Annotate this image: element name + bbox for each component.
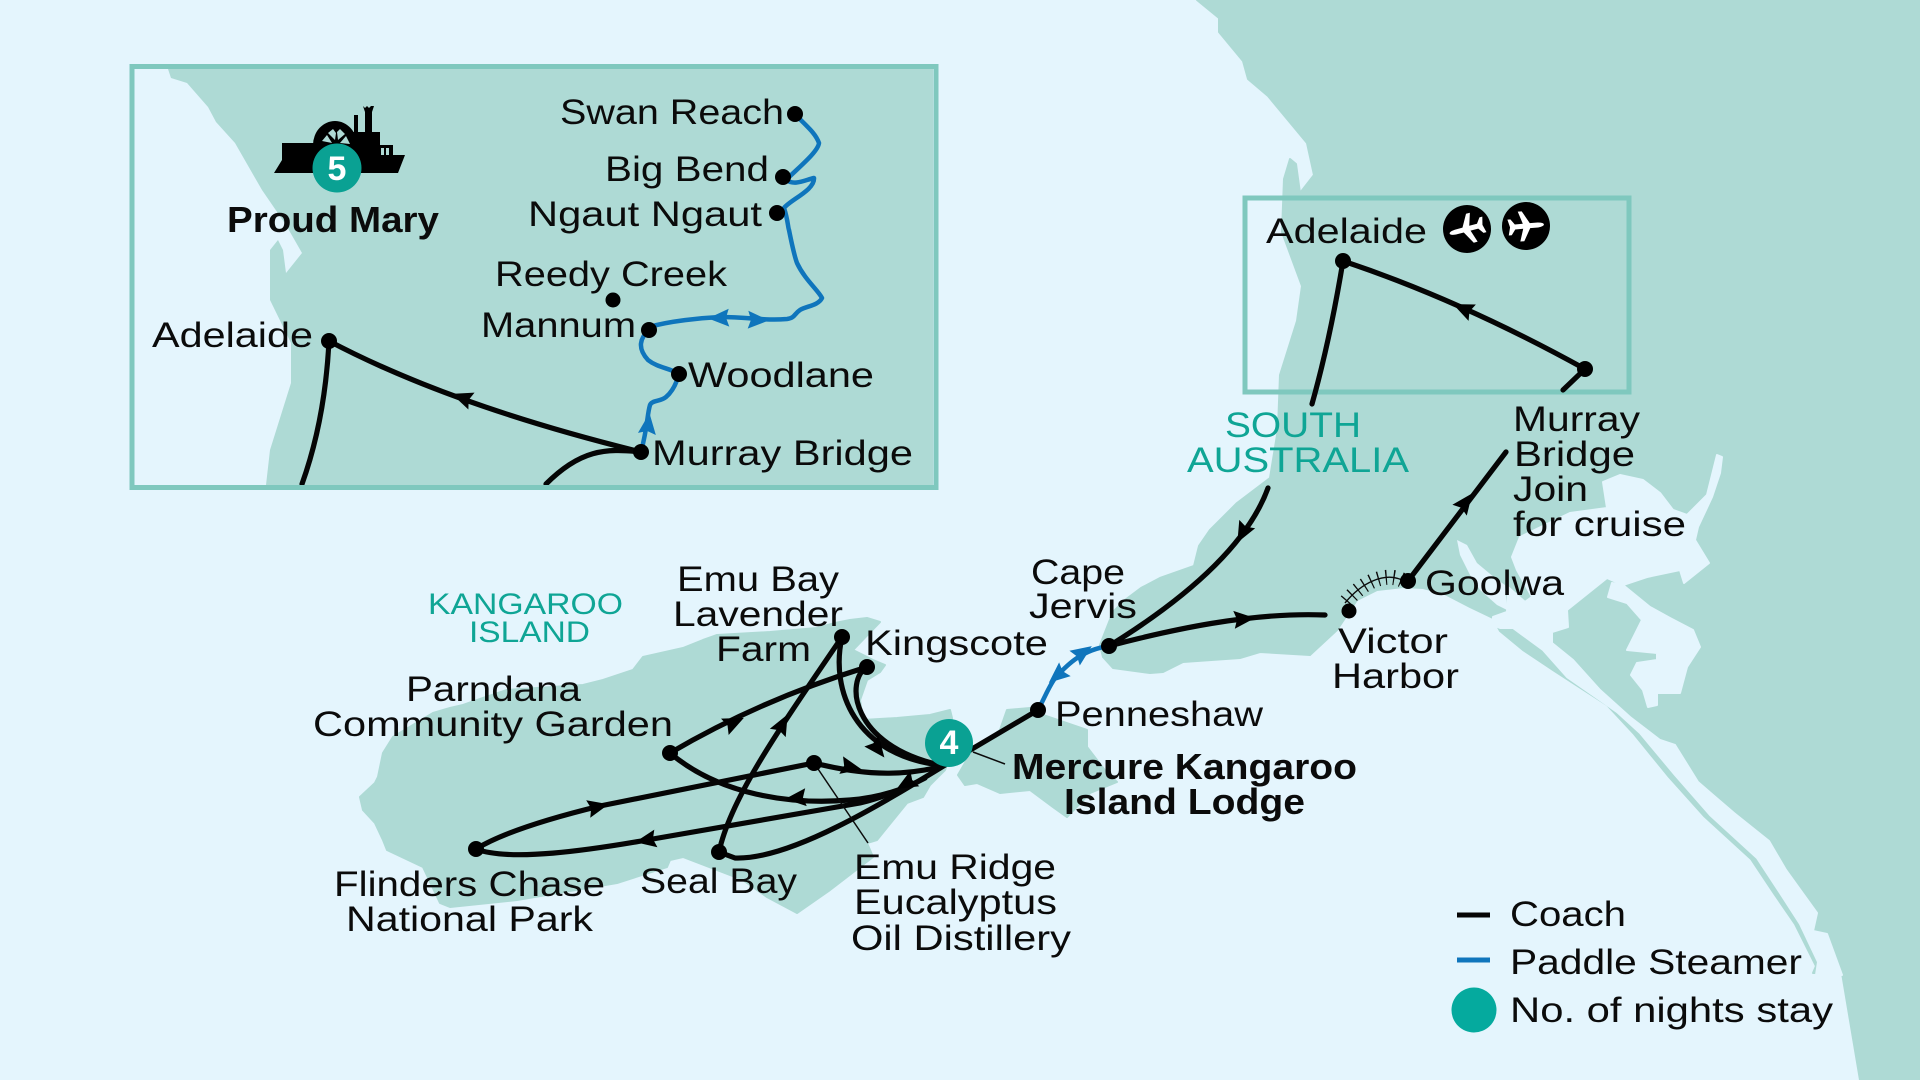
stop: Murray Bridge, join for cruise: Join	[1513, 470, 1588, 509]
stop: Parndana Community Garden	[313, 670, 678, 761]
region label: South Australia: AUSTRALIA	[1187, 441, 1410, 480]
paddle steamer ferry: Penneshaw to Cape Jervis	[1038, 639, 1109, 710]
stop: Emu Ridge Eucalyptus Oil Distillery: Eucalyptus	[854, 883, 1057, 922]
stop: Flinders Chase National Park: Flinders Chase	[334, 865, 605, 904]
coach routes: Kangaroo Island	[476, 637, 1038, 858]
legend item: coach: Coach	[1510, 895, 1626, 934]
land: Kangaroo Island	[360, 618, 1117, 913]
stop: Murray Bridge, join for cruise	[1513, 361, 1686, 544]
leader line: Mercure lodge	[973, 752, 1005, 764]
stop: Emu Ridge Eucalyptus Oil Distillery: Oil Distillery	[851, 919, 1072, 958]
leader line: Emu Ridge	[814, 763, 868, 843]
hotel label: Mercure Kangaroo Island Lodge	[1012, 746, 1357, 822]
region label: South Australia	[1187, 406, 1410, 480]
panel: Adelaide locator box	[1245, 198, 1629, 392]
hotel label: Mercure Kangaroo Island Lodge: Island Lodge	[1064, 781, 1305, 822]
nights badge: 4: 4	[940, 724, 959, 762]
icon: departure plane	[1500, 200, 1552, 252]
hotel label: Mercure Kangaroo Island Lodge: Mercure Kangaroo	[1012, 746, 1357, 787]
legend item: number of nights: No. of nights stay	[1510, 991, 1834, 1030]
inset stop: Ngaut Ngaut: Ngaut Ngaut	[528, 195, 762, 234]
stop: Cape Jervis: Jervis	[1029, 587, 1137, 626]
region label: Kangaroo Island	[428, 588, 623, 649]
stop: Adelaide with flight icons: Adelaide	[1266, 212, 1427, 251]
inset stop: Mannum: Mannum	[481, 306, 636, 345]
stop: Kingscote	[859, 624, 1048, 675]
stop: Murray Bridge, join for cruise: for cruise	[1513, 505, 1686, 544]
stop: Emu Ridge Eucalyptus Oil Distillery	[806, 755, 1072, 958]
stop: Cape Jervis: Cape	[1031, 553, 1125, 592]
inset coach routes	[302, 341, 641, 484]
inset stop: Big Bend: Big Bend	[605, 150, 769, 189]
stop: Emu Bay Lavender Farm: Emu Bay	[677, 560, 840, 599]
inset stop: Adelaide: Adelaide	[152, 316, 313, 355]
stop: Parndana Community Garden: Parndana	[406, 670, 582, 709]
icon: arrival plane	[1438, 200, 1496, 258]
legend item: coach	[1457, 895, 1626, 934]
region label: South Australia: SOUTH	[1225, 406, 1361, 445]
stop: Victor Harbor: Victor	[1338, 622, 1448, 661]
stop: Adelaide with flight icons	[1266, 200, 1552, 269]
inset stop: Swan Reach: Swan Reach	[560, 93, 784, 132]
stop: Flinders Chase National Park	[334, 841, 605, 939]
inset stop: Reedy Creek	[495, 255, 728, 308]
legend	[1452, 895, 1834, 1032]
panel: inset map of the Murray River cruise	[132, 66, 936, 488]
label: Proud Mary: Proud Mary	[227, 199, 439, 240]
stop: Cape Jervis	[1029, 553, 1137, 654]
stop: Emu Bay Lavender Farm	[673, 560, 850, 669]
stop: Flinders Chase National Park: National Park	[346, 900, 594, 939]
region label: Kangaroo Island: ISLAND	[469, 616, 590, 649]
legend item: number of nights	[1452, 988, 1834, 1032]
stop: Seal Bay	[640, 844, 798, 901]
inset panel border	[132, 66, 936, 488]
stop: Emu Bay Lavender Farm: Lavender	[673, 595, 843, 634]
nights badge: 5	[312, 144, 362, 192]
stop: Kingscote: Kingscote	[865, 624, 1048, 663]
inset stop: Reedy Creek: Reedy Creek	[495, 255, 728, 294]
stop: Seal Bay: Seal Bay	[640, 862, 798, 901]
icon: paddle steamer Proud Mary	[274, 106, 405, 173]
stop: Emu Ridge Eucalyptus Oil Distillery: Emu Ridge	[854, 848, 1056, 887]
inset stop: Woodlane: Woodlane	[688, 356, 874, 395]
legend item: paddle steamer: Paddle Steamer	[1510, 943, 1802, 982]
stop: Murray Bridge, join for cruise: Murray	[1513, 400, 1641, 439]
inset stop: Murray Bridge: Murray Bridge	[652, 434, 913, 473]
nights badge: 5: 5	[328, 150, 346, 188]
stop: Emu Bay Lavender Farm: Farm	[716, 630, 811, 669]
stop: Victor Harbor	[1332, 604, 1459, 696]
stop: Penneshaw: Penneshaw	[1055, 695, 1264, 734]
inset paddle steamer route	[638, 114, 822, 452]
stop: Goolwa: Goolwa	[1425, 564, 1565, 603]
land: mainland South Australia	[1100, 0, 1920, 1080]
stop: Parndana Community Garden: Community Garden	[313, 705, 673, 744]
heritage rail line: Goolwa to Victor Harbor	[1345, 577, 1402, 603]
nights badge: 4	[925, 719, 973, 767]
region label: Kangaroo Island: KANGAROO	[428, 588, 623, 621]
main coach routes: mainland	[1109, 261, 1585, 646]
stop: Victor Harbor: Harbor	[1332, 657, 1459, 696]
stop: Murray Bridge, join for cruise: Bridge	[1514, 435, 1635, 474]
